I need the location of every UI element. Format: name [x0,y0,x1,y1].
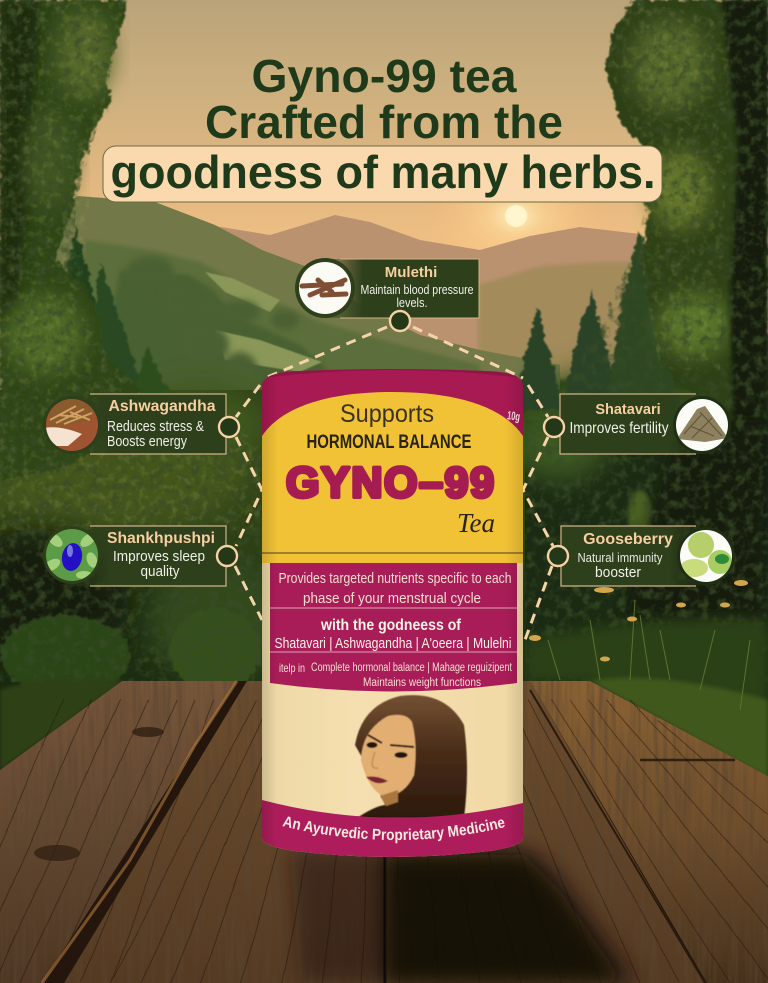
magenta info panel: with the godneess of [320,617,462,634]
magenta info panel: Complete hormonal balance | Mahage reguizipent [311,662,513,674]
icon: butterfly pea flower [46,529,98,581]
bottom magenta band [262,800,523,860]
callout: Ashwagandha [43,394,239,454]
title pill [103,146,662,202]
callout: Mulethi [295,258,479,331]
woman portrait [355,695,467,818]
callout: Shatavari: Improves fertility [570,420,668,437]
callout: Mulethi: Maintain blood pressure [360,283,474,297]
yellow arched panel [262,392,523,565]
background: large right tree [605,0,768,620]
magenta info panel: Maintains weight functions [363,677,481,689]
title line 1: Gyno-99 tea [252,50,517,102]
title line 2: Crafted from the [205,96,563,148]
product tin [262,369,523,857]
net weight: 10g [506,408,521,424]
node [548,546,568,566]
brand: Tea: Tea [457,508,495,538]
background: meadow [0,580,768,780]
background: green forest hillside [0,196,560,450]
dashed connector lines [235,327,553,640]
background: large left tree [0,0,150,480]
background: dark foliage texture [0,0,768,682]
callout: Mulethi: levels. [396,296,428,310]
background: shrubs [0,608,260,695]
callout: Gooseberry: Gooseberry [583,531,673,548]
magenta info panel: itelp in [279,661,305,675]
tin body: crimson top [262,369,523,436]
background: pine trees [42,225,680,425]
title block [103,50,662,202]
title line 3: goodness of many herbs. [110,146,656,198]
magenta info panel: Provides targeted nutrients specific to each [278,570,512,587]
callout: Gooseberry [548,526,735,586]
callout: Shankhpushpi: Shankhpushpi [107,530,215,547]
background: distant mountains [215,215,650,380]
callout: Shankhpushpi: Improves sleep [113,548,205,565]
background: mid forest band [0,370,768,700]
wooden table [0,681,768,983]
callout: Shankhpushpi: quality [140,563,180,580]
heading: Supports: Supports [340,400,434,428]
node [544,417,564,437]
magenta info panel: Shatavari | Ashwagandha | A'oeera | Mulelni [274,635,512,652]
callout: Shatavari [544,394,731,454]
callout: Mulethi: Mulethi [385,264,437,281]
icon: shatavari pile [676,399,728,451]
icon: ashwagandha roots and powder [46,399,98,451]
callout: Gooseberry: Natural immunity [578,550,663,565]
node [390,311,410,331]
heading: hormonal balance: HORMONAL BALANCE [306,432,472,453]
magenta info panel [270,563,517,692]
magenta info panel: phase of your menstrual cycle [303,590,481,607]
callout: Ashwagandha: Boosts energy [107,433,187,450]
callout: Shankhpushpi [42,526,237,586]
icon: gooseberries [680,530,732,582]
callout: Shatavari: Shatavari [595,402,661,418]
brand: GYNO-99: GYNO–99 [286,459,494,507]
node [219,417,239,437]
callout: Ashwagandha: Ashwagandha [108,398,216,415]
background: bright foliage texture [0,0,730,530]
label: ayurvedic text: An Ayurvedic Proprietary Medicine [282,816,505,844]
callout: Ashwagandha: Reduces stress & [107,418,204,435]
tin shadow on table [290,850,640,983]
background: sunset sky [0,0,768,360]
lower tin band [262,563,523,860]
top rim [267,369,518,378]
wood grain lines [0,700,768,983]
node [217,546,237,566]
callout: Gooseberry: booster [595,564,641,581]
icon: licorice sticks [299,262,351,314]
